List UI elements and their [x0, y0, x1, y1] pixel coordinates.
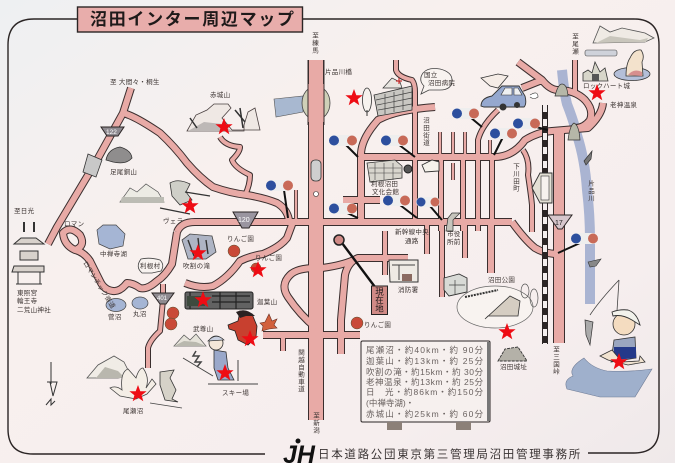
shield 401: 401: [157, 296, 168, 302]
map labels: 下川田町: [512, 163, 520, 192]
icon: top-right scenery: [585, 26, 654, 56]
route shields: [101, 127, 572, 304]
icon: hot spring bather: [614, 50, 650, 80]
map labels: 所前: [447, 237, 461, 246]
shield 120: 120: [238, 217, 250, 224]
map labels: ロマンチック街道: [81, 259, 118, 310]
icon: villa mountains and skier: [120, 181, 210, 214]
map labels: 利根沼田: [371, 179, 398, 188]
shield 401: [152, 293, 174, 304]
distance table: [361, 341, 490, 430]
icon: fire station: [389, 260, 418, 282]
road network: [48, 60, 603, 420]
map labels: 至 大間々・桐生: [110, 77, 160, 86]
icon: hiker: [150, 370, 182, 408]
shield 122: 122: [106, 129, 117, 136]
distance table: 尾瀬沼・約40km・約 90分: [366, 345, 483, 355]
map labels: りんご園: [364, 320, 391, 329]
distance table: 迦葉山・約13km・約 25分: [366, 356, 483, 366]
icon: Bushi mountain and trees: [174, 334, 206, 367]
map labels: 新幹線中央: [395, 227, 429, 236]
icon: river bridges: [555, 84, 580, 140]
map labels: 市役: [447, 229, 461, 238]
distance table: 老神温泉・約13km・約 25分: [366, 377, 483, 387]
river: Katashina: [562, 70, 590, 304]
bubble: Tone village: [138, 258, 163, 273]
map labels: 沼田街道: [422, 116, 430, 147]
bubble: Tone village: 利根村: [140, 261, 161, 270]
icon: apples: [165, 245, 363, 330]
shield 17: [548, 215, 572, 229]
map labels: 輪王寺: [17, 296, 38, 305]
current location marker: [334, 235, 388, 314]
bubble: hospital label: 国立: [424, 70, 438, 79]
map labels: 武尊山: [193, 324, 213, 333]
icon: hospital: [374, 78, 412, 116]
bubble: hospital label: [421, 68, 455, 94]
icon: Akagi mountain with hiker: [187, 104, 260, 131]
icon: Fukiwari falls: [182, 234, 216, 259]
distance table: (中禅寺湖)・: [366, 398, 414, 408]
map labels: 関越自動車道: [296, 349, 305, 393]
icon: castle ruin stones: [498, 347, 527, 361]
map labels: 至三国峠: [552, 346, 560, 376]
map labels: 赤城山: [210, 91, 230, 99]
icon: copper mine hill: [106, 147, 132, 163]
map labels: 至練馬: [310, 32, 319, 54]
distance table: 吹割の滝・約15km・約 30分: [366, 367, 483, 377]
icon: north arrow: [46, 362, 57, 405]
footer: organisation: 日本道路公団東京第三管理局沼田管理事務所: [318, 447, 582, 461]
traffic signals: [266, 108, 598, 253]
icon: fishing lake: [566, 358, 652, 397]
icon: tunnel: [83, 154, 102, 177]
map labels: 老神温泉: [610, 100, 637, 109]
map labels: ロックハート城: [583, 82, 630, 90]
title: 沼田インター周辺マップ: [90, 10, 296, 29]
icon: Nikko temple: [12, 222, 44, 284]
map labels: りんご園: [255, 253, 282, 262]
shield 17: 17: [555, 220, 563, 227]
map labels: 至尾瀬: [570, 33, 579, 55]
icon: maple leaf: [260, 314, 277, 331]
distance table: 日 光・約86km・約150分: [366, 387, 483, 397]
icon: Oze mountain and flowers: [87, 356, 156, 399]
icon: culture hall: [367, 160, 412, 182]
map labels: りんご園: [227, 234, 254, 243]
map labels: 片品川: [586, 179, 595, 202]
bubble: hospital label: 沼田病院: [428, 78, 455, 87]
icon: tower building: [446, 213, 460, 231]
icon: tengu mask: [228, 310, 257, 345]
current location marker: 現在地: [374, 287, 384, 312]
icon: Suganuma ponds: [106, 297, 148, 312]
map labels: 片品川橋: [325, 67, 352, 76]
map labels: 吹割の滝: [183, 261, 210, 270]
icon: house: [422, 160, 439, 172]
icon: castle: [583, 62, 608, 81]
icon: fisherman: [585, 280, 645, 365]
map labels: 迦葉山: [257, 297, 277, 306]
map labels: 足尾銅山: [110, 167, 137, 176]
map labels: 通路: [405, 236, 419, 245]
map labels: ヴェラ: [163, 216, 183, 225]
icon: city hall: [444, 274, 467, 296]
map labels: 東照宮: [17, 288, 37, 297]
map labels: 文化会館: [372, 187, 399, 196]
icon: bridge and sign: [274, 60, 330, 125]
icon: tunnel marker on river: [584, 151, 592, 165]
title: [78, 7, 302, 32]
railway: [542, 105, 548, 344]
map labels: 二荒山神社: [17, 305, 51, 314]
map labels: ロマン: [64, 220, 84, 228]
map labels: 尾瀬沼: [123, 406, 143, 415]
shield 122: [101, 127, 124, 136]
icon: railway station: [532, 173, 552, 203]
map labels: 沼田城址: [500, 362, 527, 371]
map labels: スキー場: [222, 388, 249, 397]
icon: heron on river: [588, 259, 601, 267]
icon: Lake Chuzenji: [97, 225, 125, 249]
icon: expressway car: [311, 160, 321, 196]
distance table: 赤城山・約25km・約 60分: [366, 409, 483, 419]
map labels: 丸沼: [133, 309, 147, 318]
red star markers: [129, 84, 628, 401]
map labels: 至日光: [14, 206, 35, 215]
map labels: 至新潟: [312, 412, 320, 434]
icon: car and driver: [481, 74, 538, 110]
map labels: 沼田公園: [488, 275, 515, 284]
map labels: 消防署: [398, 285, 419, 294]
icon: steam locomotive: [185, 292, 253, 309]
icon: park oval with slide: [457, 284, 538, 328]
map labels: 菅沼: [108, 312, 122, 321]
shield 120: [233, 212, 258, 228]
icon: tree: [362, 88, 372, 116]
icon: skier: [183, 336, 258, 384]
map labels: 中禅寺湖: [100, 249, 127, 258]
